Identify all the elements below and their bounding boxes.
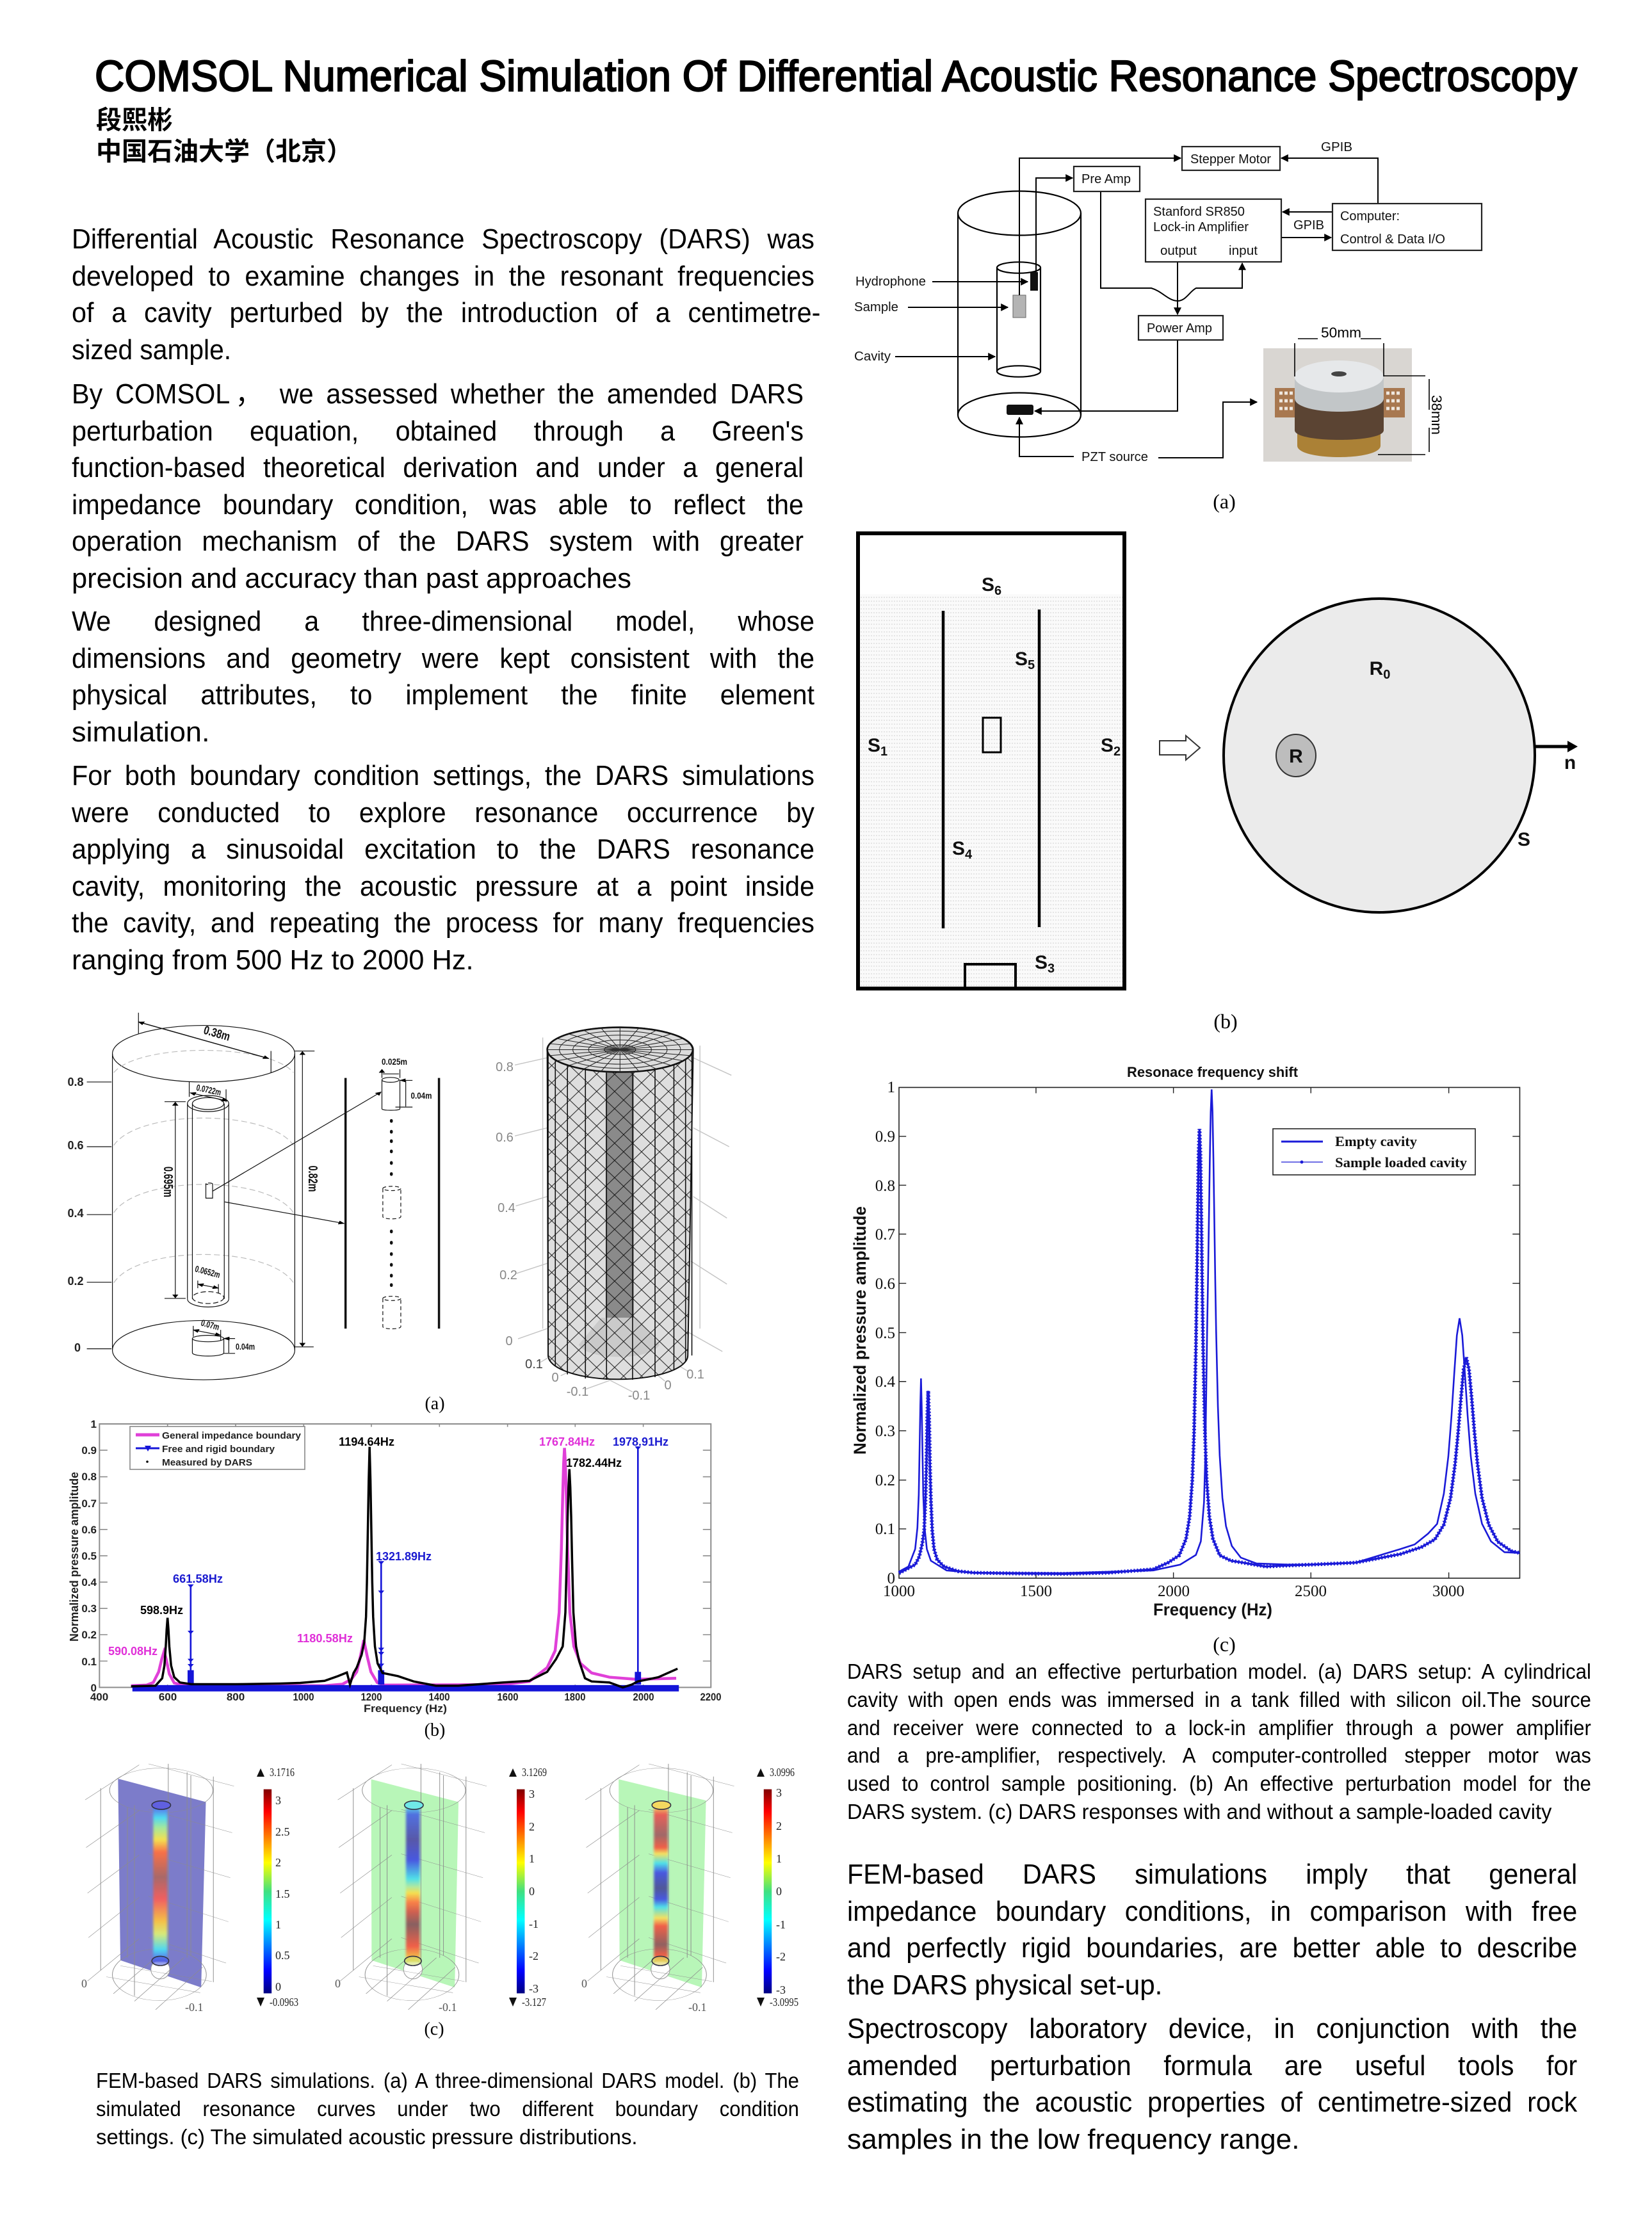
- block and component labels: Pre Amp: [1081, 172, 1131, 186]
- colour bar labels: 3: [275, 1794, 281, 1807]
- x axis tick labels: 1800: [565, 1691, 585, 1703]
- legend: Free and rigid boundary: [162, 1444, 275, 1455]
- dimension labels: 0.695m: [161, 1167, 175, 1197]
- intro paragraph 4: applying a sinusoidal excitation to the DARS resonance: [72, 834, 814, 865]
- x axis tick labels: 1400: [429, 1691, 449, 1703]
- caption: left figures: simulated resonance curves under two different boundary condition: [96, 2097, 799, 2121]
- x axis tick labels: 2000: [1158, 1583, 1190, 1600]
- y axis tick labels: 1: [91, 1418, 97, 1430]
- mesh axis labels: -0.1: [628, 1389, 650, 1403]
- colour bar labels: 1: [529, 1852, 535, 1865]
- x axis tick labels: 1500: [1020, 1583, 1052, 1600]
- y axis title: Normalized pressure amplitude: [68, 1472, 81, 1642]
- intro paragraph 3: We designed a three-dimensional model, whose: [72, 606, 814, 637]
- colour bar labels: 0.5: [275, 1949, 289, 1962]
- legend: [130, 1426, 305, 1469]
- dimension labels: 0.025m: [382, 1056, 407, 1067]
- surface labels S1 to S6: 5: [1028, 658, 1035, 672]
- x axis tick labels: 2500: [1295, 1583, 1327, 1600]
- peak frequency labels: 1782.44Hz: [566, 1457, 622, 1469]
- intro paragraph 3: [72, 606, 814, 748]
- colour bar labels: 0: [81, 1977, 87, 1990]
- peak frequency labels: 1321.89Hz: [376, 1550, 432, 1563]
- colour bar labels: 2: [529, 1820, 535, 1833]
- colour bar labels: -0.0963: [270, 1996, 298, 2008]
- intro paragraph 1: developed to examine changes in the resonant frequencies: [72, 260, 814, 292]
- colour bar labels: -2: [776, 1950, 786, 1963]
- mesh axis labels: 0.8: [496, 1060, 514, 1074]
- x axis tick labels: 600: [159, 1691, 177, 1703]
- block and component labels: GPIB: [1321, 140, 1352, 154]
- x axis tick labels: [90, 1691, 721, 1703]
- peak frequency labels: 598.9Hz: [140, 1604, 183, 1617]
- dimension labels: 0.04m: [236, 1341, 255, 1352]
- y axis tick labels: 0.5: [81, 1550, 97, 1562]
- figure label (b): (b): [425, 1720, 445, 1740]
- conclusion paragraph 1: and perfectly rigid boundaries, are better able to describe: [847, 1932, 1577, 1964]
- dimension labels: [161, 1024, 432, 1352]
- circular domain R0 with sample R: [1224, 599, 1535, 912]
- intro paragraph 2: function-based theoretical derivation and under a general: [72, 452, 804, 483]
- mesh axis labels: 0: [664, 1378, 672, 1393]
- normal arrow n: n: [1564, 752, 1576, 773]
- intro paragraph 1: Differential Acoustic Resonance Spectroscopy (DARS) was: [72, 223, 814, 255]
- figure label (b): (b): [1213, 1010, 1238, 1033]
- block and component labels: Hydrophone: [855, 275, 926, 289]
- figure (c): resonance frequency shift chart: [850, 1064, 1519, 1656]
- surface labels S1 to S6: S: [982, 574, 994, 595]
- y axis tick labels: 0.5: [875, 1325, 895, 1342]
- photo of PZT source: [1263, 348, 1412, 462]
- surface labels S1 to S6: 4: [965, 848, 973, 862]
- intro paragraph 2: precision and accuracy than past approaches: [72, 562, 631, 594]
- caption: right figures: and receiver were connected to a lock-in amplifier through a power amplifier: [847, 1716, 1591, 1740]
- colour bar labels: -3.127: [522, 1996, 546, 2008]
- caption: right figures: DARS system. (c) DARS responses with and without a sample-loaded cavity: [847, 1800, 1551, 1823]
- pressure plot 3: [585, 1764, 772, 2010]
- conclusion paragraph 2: amended perturbation formula are useful tools for: [847, 2050, 1577, 2081]
- colour bar labels: -0.1: [688, 2001, 707, 2014]
- colour bar labels: 1.5: [275, 1887, 289, 1900]
- block and component labels: Lock-in Amplifier: [1153, 220, 1249, 234]
- block and component labels: Cavity: [854, 350, 891, 364]
- block diagram connectors: [895, 158, 1378, 458]
- figure label (c): (c): [424, 2019, 444, 2039]
- dimension labels: 0.04m: [411, 1090, 432, 1101]
- x axis tick labels: 400: [90, 1691, 108, 1703]
- intro paragraph 2: perturbation equation, obtained through a Green's: [72, 415, 804, 447]
- figure (b): effective perturbation model: [858, 533, 1578, 1033]
- block and component labels: Stanford SR850: [1153, 205, 1245, 219]
- block and component labels: PZT source: [1081, 450, 1148, 464]
- x axis tick labels: 3000: [1432, 1583, 1464, 1600]
- peak frequency labels: 1180.58Hz: [297, 1632, 353, 1645]
- y axis tick labels: 0.8: [81, 1471, 97, 1483]
- intro paragraph 4: ranging from 500 Hz to 2000 Hz.: [72, 944, 474, 976]
- colour bar labels: 1: [776, 1852, 782, 1865]
- photo dimensions: [1295, 339, 1429, 455]
- peak frequency labels: [108, 1435, 668, 1658]
- colour bar labels: 2.5: [275, 1825, 289, 1838]
- height axis labels: [67, 1076, 84, 1354]
- y axis tick labels: 0.1: [81, 1656, 97, 1668]
- intro paragraph 2: operation mechanism of the DARS system with greater: [72, 526, 804, 557]
- outer cavity cylinder: [958, 191, 1081, 437]
- tank with silicon oil: [858, 533, 1124, 989]
- colour bar max and min triangles: [257, 1768, 765, 2007]
- conclusion paragraph 2: estimating the acoustic properties of centimetre-sized rock: [847, 2087, 1577, 2118]
- legend: General impedance boundary: [162, 1430, 302, 1441]
- conclusion paragraph 1: [847, 1859, 1577, 2000]
- intro paragraph 1: [72, 223, 820, 365]
- intro paragraph 4: were conducted to explore resonance occurrence by: [72, 796, 814, 828]
- axes and curves: [899, 1087, 1519, 1578]
- y axis tick labels: 0.2: [875, 1472, 895, 1489]
- y axis tick labels: [875, 1079, 895, 1587]
- block and component labels: Control & Data I/O: [1340, 232, 1445, 246]
- caption: right figures: used to control sample positioning. (b) An effective perturbation model for the: [847, 1772, 1591, 1795]
- mesh axis labels: 0.1: [686, 1368, 704, 1382]
- intro paragraph 4: [72, 760, 814, 976]
- colour bar labels: 0: [776, 1885, 782, 1898]
- peak frequency labels: 1194.64Hz: [339, 1435, 394, 1448]
- x axis tick labels: 1600: [497, 1691, 519, 1703]
- peak frequency labels: 661.58Hz: [173, 1572, 223, 1585]
- intro paragraph 3: physical attributes, to implement the finite element: [72, 679, 814, 711]
- peak frequency labels: 590.08Hz: [108, 1645, 158, 1658]
- caption: left figures: FEM-based DARS simulations. (a) A three-dimensional DARS model. (b) The: [96, 2069, 799, 2092]
- intro paragraph 2: By COMSOL， we assessed whether the amended DARS: [72, 378, 804, 410]
- legend: [1273, 1129, 1475, 1175]
- colour bar labels: 3: [529, 1788, 535, 1800]
- y axis title: Normalized pressure amplitude: [850, 1206, 870, 1455]
- colour bar labels: 2: [776, 1820, 782, 1832]
- x axis tick labels: 2200: [700, 1691, 721, 1703]
- y axis tick labels: 0.7: [81, 1498, 97, 1510]
- height axis labels: 0: [74, 1341, 81, 1354]
- circular domain R0 with sample R: R: [1289, 746, 1303, 767]
- mesh axis labels: 0: [505, 1334, 513, 1348]
- x axis tick labels: [883, 1583, 1464, 1600]
- y axis tick labels: 0.3: [81, 1603, 97, 1615]
- figure (a): DARS setup schematic: [854, 140, 1482, 513]
- surface labels S1 to S6: [868, 574, 1121, 976]
- mesh axis labels: 0.6: [496, 1131, 514, 1145]
- affiliation: 中国石油大学（北京）: [96, 138, 352, 166]
- x axis title: Frequency (Hz): [364, 1702, 447, 1715]
- height axis labels: 0.6: [67, 1139, 84, 1152]
- y axis tick labels: 0.9: [81, 1444, 97, 1457]
- block boxes: [1074, 147, 1482, 340]
- y axis tick labels: 0: [91, 1682, 97, 1694]
- y axis tick labels: 0.3: [875, 1423, 895, 1440]
- y axis tick labels: 0: [887, 1570, 895, 1587]
- chart title: Resonace frequency shift: [1127, 1064, 1299, 1080]
- block and component labels: Power Amp: [1147, 321, 1212, 335]
- colour bar labels: -3: [529, 1982, 539, 1995]
- colour bar labels: -3: [776, 1984, 786, 1996]
- dimension label 38mm: 38mm: [1429, 395, 1445, 435]
- figure label (a): (a): [1213, 490, 1236, 513]
- caption: right figures: DARS setup and an effective perturbation model. (a) DARS setup: A cylindrical: [847, 1660, 1591, 1683]
- dimension labels: 0.82m: [305, 1165, 320, 1192]
- mesh axis labels: -0.1: [567, 1385, 588, 1399]
- block and component labels: Stepper Motor: [1190, 152, 1271, 166]
- circular domain R0 with sample R: S: [1518, 829, 1530, 850]
- surface labels S1 to S6: 1: [880, 745, 887, 759]
- height axis labels: 0.2: [67, 1275, 84, 1288]
- peak frequency labels: 1978.91Hz: [613, 1435, 668, 1448]
- y axis tick labels: 0.1: [875, 1521, 895, 1538]
- block and component labels: GPIB: [1293, 218, 1324, 232]
- colour bar labels: 3.1269: [522, 1766, 547, 1779]
- surface labels S1 to S6: S: [1035, 952, 1048, 973]
- y axis tick labels: 0.6: [81, 1524, 97, 1536]
- intro paragraph 3: dimensions and geometry were kept consistent with the: [72, 643, 814, 674]
- intro paragraph 1: sized sample.: [72, 334, 231, 365]
- colour bar labels: 0: [581, 1977, 587, 1990]
- x axis tick labels: 1000: [883, 1583, 915, 1600]
- surface labels S1 to S6: 3: [1048, 962, 1055, 976]
- surface labels S1 to S6: 2: [1113, 745, 1121, 759]
- conclusion paragraph 1: FEM-based DARS simulations imply that general: [847, 1859, 1577, 1890]
- x axis title: Frequency (Hz): [1153, 1600, 1272, 1619]
- colour bar labels: 1: [275, 1918, 281, 1931]
- y axis tick labels: 0.9: [875, 1128, 895, 1145]
- legend: Sample loaded cavity: [1335, 1154, 1467, 1170]
- conclusion paragraph 1: the DARS physical set-up.: [847, 1969, 1162, 2000]
- author name: 段熙彬: [96, 106, 173, 134]
- conclusion paragraph 1: impedance boundary conditions, in comparison with free: [847, 1895, 1577, 1927]
- mesh axis labels: 0: [551, 1371, 559, 1385]
- intro paragraph 3: simulation.: [72, 716, 209, 748]
- block and component labels: Sample: [854, 300, 898, 314]
- block and component labels: Computer:: [1340, 209, 1400, 223]
- hollow arrow: [1160, 736, 1200, 760]
- colour bar labels: -3.0995: [770, 1996, 798, 2008]
- colour bar labels: 3.0996: [770, 1766, 795, 1779]
- figure label (a): (a): [425, 1394, 445, 1414]
- mesh axis labels: 0.2: [499, 1268, 517, 1282]
- intro paragraph 1: of a cavity perturbed by the introduction of a centimetre-: [72, 297, 820, 328]
- pressure plot 1: [85, 1764, 271, 2010]
- caption: right figures: and a pre-amplifier, respectively. A computer-controlled stepper motor was: [847, 1743, 1591, 1767]
- normal arrow n: [1535, 741, 1578, 773]
- figure label (c): (c): [1213, 1633, 1236, 1656]
- left figure (a): three-dimensional DARS model: [67, 1013, 731, 1414]
- conclusion paragraph 2: [847, 2013, 1578, 2155]
- colour bar labels: [81, 1766, 798, 2014]
- caption: right figures: [847, 1660, 1591, 1823]
- circular domain R0 with sample R: 0: [1383, 668, 1390, 682]
- colour bar labels: -1: [776, 1918, 786, 1931]
- x axis tick labels: 2000: [633, 1691, 654, 1703]
- y axis tick labels: 1: [887, 1079, 895, 1096]
- y axis tick labels: [81, 1418, 97, 1694]
- y axis tick labels: 0.6: [875, 1275, 895, 1293]
- colour bar labels: 2: [275, 1856, 281, 1869]
- intro paragraph 2: [72, 378, 804, 594]
- icon: PZT source: [1007, 405, 1033, 415]
- surface labels S1 to S6: 6: [994, 584, 1001, 598]
- x axis tick labels: 800: [227, 1691, 245, 1703]
- x axis tick labels: 1200: [361, 1691, 382, 1703]
- circular domain R0 with sample R: R: [1370, 658, 1383, 679]
- intro paragraph 4: For both boundary condition settings, the DARS simulations: [72, 760, 814, 791]
- colour bar labels: 3.1716: [270, 1766, 295, 1779]
- block and component labels: input: [1229, 244, 1258, 258]
- surface labels S1 to S6: S: [952, 838, 965, 859]
- icon: hydrophone: [1030, 272, 1038, 291]
- mesh axis labels: 0.4: [498, 1201, 515, 1215]
- peak frequency labels: 1767.84Hz: [539, 1435, 595, 1448]
- dimension labels: 0.0722m: [195, 1082, 222, 1097]
- left figure (b): simulated resonance curves: [68, 1418, 721, 1740]
- surface labels S1 to S6: S: [1101, 735, 1113, 756]
- block and component labels: output: [1160, 244, 1197, 258]
- height axis labels: 0.4: [67, 1207, 84, 1220]
- legend: Empty cavity: [1335, 1133, 1417, 1149]
- colour bar labels: 0: [275, 1980, 281, 1993]
- icon: rock sample: [1013, 295, 1026, 318]
- mesh axis labels: [496, 1060, 704, 1403]
- y axis tick labels: 0.4: [81, 1576, 97, 1588]
- dimension labels: 0.38m: [202, 1024, 232, 1044]
- dimension labels: 0.07m: [200, 1318, 220, 1332]
- intro paragraph 4: cavity, monitoring the acoustic pressure at a point inside: [72, 871, 814, 901]
- conclusion paragraph 2: samples in the low frequency range.: [847, 2123, 1299, 2155]
- colour bar labels: -0.1: [439, 2001, 457, 2014]
- dimension labels: 0.0652m: [194, 1263, 222, 1280]
- y axis tick labels: 0.8: [875, 1177, 895, 1195]
- intro paragraph 4: the cavity, and repeating the process for many frequencies: [72, 907, 814, 939]
- colour bar labels: -2: [529, 1950, 539, 1962]
- colour bar labels: 0: [529, 1885, 535, 1898]
- colour bar labels: -1: [529, 1918, 539, 1930]
- x axis tick labels: 1000: [293, 1691, 314, 1703]
- legend: Measured by DARS: [162, 1457, 252, 1468]
- mesh axis labels: 0.1: [525, 1357, 543, 1371]
- caption: left figures: [96, 2069, 799, 2149]
- caption: right figures: cavity with open ends was immersed in a tank filled with silicon oil.The source: [847, 1688, 1591, 1711]
- colour bar labels: -0.1: [185, 2001, 204, 2014]
- left figure (c): simulated acoustic pressure distributions: [81, 1764, 798, 2039]
- caption: left figures: settings. (c) The simulated acoustic pressure distributions.: [96, 2125, 638, 2149]
- colour bar labels: 3: [776, 1786, 782, 1799]
- surface labels S1 to S6: S: [868, 735, 880, 756]
- y axis tick labels: 0.7: [875, 1226, 895, 1243]
- surface labels S1 to S6: S: [1015, 649, 1028, 670]
- title: COMSOL Numerical Simulation Of Differential Acoustic Resonance Spectroscopy: [95, 52, 1577, 101]
- cylinder dimension drawing: [87, 1013, 439, 1380]
- intro paragraph 2: impedance boundary condition, was able to reflect the: [72, 489, 804, 520]
- block and component labels: [854, 140, 1445, 464]
- colour bar labels: 0: [335, 1977, 341, 1990]
- finite element mesh cylinder: [515, 1027, 731, 1392]
- y axis tick labels: 0.4: [875, 1373, 895, 1391]
- height axis labels: 0.8: [67, 1076, 84, 1088]
- y axis tick labels: 0.2: [81, 1629, 97, 1641]
- axes and curves: [99, 1424, 711, 1692]
- pressure plot 2: [338, 1764, 524, 2010]
- dimension label 50mm: 50mm: [1321, 325, 1361, 341]
- conclusion paragraph 2: Spectroscopy laboratory device, in conjunction with the: [847, 2013, 1577, 2044]
